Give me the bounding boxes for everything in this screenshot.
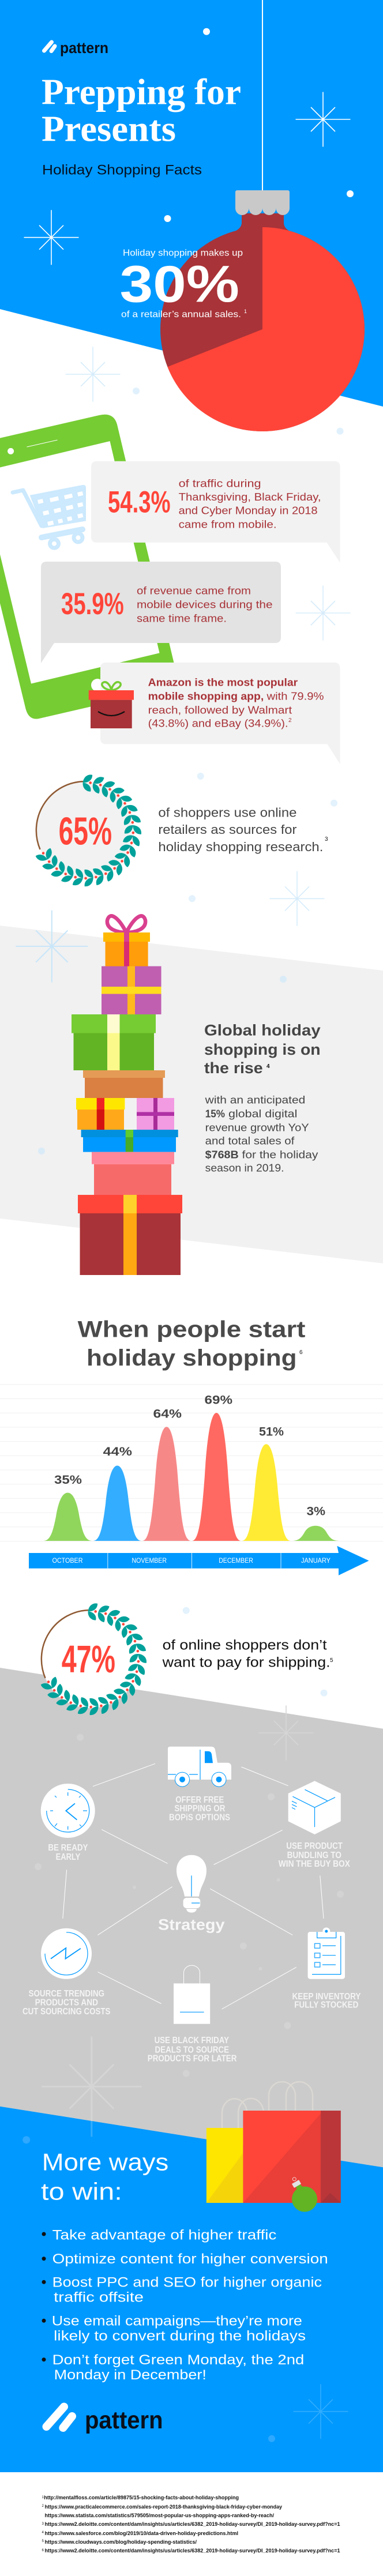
heading: when people start holiday shopping <box>78 1317 305 1371</box>
footnotes: sources: https://www.practicalecommerce.com/sales-report-2018-thanksgiving-black-friday-cyber-monday <box>45 2504 283 2510</box>
footnotes: sources: http://mentalfloss.com/article/89875/15-shocking-facts-about-holiday-shopping <box>44 2495 239 2501</box>
footnotes: sources: https://www2.deloitte.com/content/dam/insights/us/articles/6382_2019-holiday-survey/DI_2019-holiday-survey.pdf?nc=1 <box>45 2548 340 2554</box>
icon: product box <box>288 1781 341 1834</box>
label: product bundling: USE PRODUCT <box>286 1841 343 1851</box>
panel: revenue speech bubble: of revenue came from <box>137 585 251 597</box>
panel: Amazon speech bubble: (43.8%) and eBay (34.9%). <box>148 717 288 729</box>
callout: holiday shopping 30 percent <box>120 249 247 319</box>
chart: bell bars by month: 51% <box>259 1426 284 1439</box>
label: be ready early: BE READY <box>48 1843 88 1853</box>
subtitle: Holiday Shopping Facts <box>42 163 202 178</box>
text block: global revenue growth: global digital <box>228 1108 297 1120</box>
footnotes: sources: 5 <box>42 2540 44 2543</box>
callout: holiday shopping 30 percent: 30% <box>120 256 239 314</box>
text block: global revenue growth: $768B <box>205 1149 239 1160</box>
panel: traffic speech bubble: and Cyber Monday in 2018 <box>179 505 318 516</box>
icon: shopping bag <box>174 1965 210 2024</box>
text block: 65% of shoppers: retailers as sources for <box>158 822 296 837</box>
panel: Amazon speech bubble <box>100 663 340 764</box>
footnotes: sources: https://www.cloudways.com/blog/holiday-spending-statistics/ <box>45 2539 197 2545</box>
heading: when people start holiday shopping: When people start <box>78 1317 305 1342</box>
label: source trending products: PRODUCTS AND <box>35 1998 98 2007</box>
callout: holiday shopping 30 percent: of a retailer’s annual sales. <box>121 310 241 319</box>
text block: 65% of shoppers: holiday shopping research. <box>158 840 323 854</box>
label: black friday deals: PRODUCTS FOR LATER <box>148 2054 236 2063</box>
heading: global holiday shopping <box>204 1022 321 1077</box>
footnotes: sources: 4 <box>42 2531 44 2534</box>
callout: holiday shopping 30 percent: Holiday shopping makes up <box>123 249 243 258</box>
logo: pattern bottom <box>46 2406 163 2434</box>
footnotes: sources <box>42 2495 340 2554</box>
bullet list: tactics: Monday in December! <box>54 2367 206 2383</box>
text block: 65% of shoppers: 3 <box>325 836 328 843</box>
decorative snow: strategy section <box>35 1607 344 2077</box>
panel: grey gift band <box>0 926 383 1263</box>
wreath chart: 65% <box>35 774 142 887</box>
bullet list: tactics: Boost PPC and SEO for higher organic <box>52 2275 322 2291</box>
label: free shipping <box>169 1795 230 1823</box>
footnotes: sources: https://www.salesforce.com/blog/2019/10/data-driven-holiday-predictions.html <box>45 2530 238 2537</box>
panel: revenue speech bubble <box>41 562 281 663</box>
chart: bell bars by month: 44% <box>103 1445 132 1458</box>
label: free shipping: BOPiS OPTIONS <box>169 1813 230 1823</box>
decorative snow: wreath area <box>189 773 337 926</box>
label: black friday deals: DEALS TO SOURCE <box>155 2045 229 2055</box>
label: product bundling: BUNDLING TO <box>287 1851 341 1860</box>
panel: blue more ways section <box>0 2107 383 2472</box>
text block: global revenue growth: with an anticipated <box>205 1094 305 1105</box>
callout: holiday shopping 30 percent: 1 <box>244 309 247 314</box>
chart: bell bars by month <box>0 1385 383 1541</box>
title <box>42 72 241 149</box>
text block: 65% of shoppers: of shoppers use online <box>158 806 296 820</box>
panel: traffic speech bubble: came from mobile. <box>179 518 277 530</box>
illustration: shopping bags <box>206 2082 341 2203</box>
title: Presents <box>42 109 176 149</box>
panel: Amazon speech bubble: 2 <box>288 717 292 724</box>
connector lines: strategy network <box>63 1763 324 2009</box>
label: free shipping: OFFER FREE <box>175 1795 224 1805</box>
text block: global revenue growth: 15% <box>205 1108 225 1120</box>
footnotes: sources: 2 <box>42 2504 44 2508</box>
text block: 47% of online shoppers: of online shoppers don’t <box>163 1638 327 1653</box>
heading: more ways to win: to win: <box>41 2178 122 2205</box>
text block: 47% of online shoppers <box>162 1638 333 1671</box>
text block: 47% of online shoppers: want to pay for shipping. <box>162 1655 331 1671</box>
text block: 65% of shoppers <box>158 806 328 854</box>
label: product bundling: WIN THE BUY BOX <box>279 1859 350 1869</box>
arrow: month timeline <box>29 1546 369 1575</box>
chart: bell bars by month: 69% <box>204 1393 232 1407</box>
icon: delivery truck <box>168 1747 231 1787</box>
bullet list: tactics: Don’t forget Green Monday, the 2nd <box>52 2352 304 2368</box>
label: Strategy: Strategy <box>158 1916 225 1933</box>
panel: Amazon speech bubble: with 79.9% <box>266 691 324 702</box>
icon: Amazon gift box <box>89 682 134 728</box>
footnotes: sources: https://www.statista.com/statistics/579505/most-popular-us-shopping-apps-ranked-by-reach/ <box>45 2513 274 2519</box>
title: Prepping for <box>42 72 241 112</box>
text block: global revenue growth: revenue growth YoY <box>205 1122 309 1134</box>
wreath chart: 47%: 47% <box>62 1638 115 1681</box>
panel: blue header background <box>0 0 383 407</box>
bullet list: tactics: traffic offsite <box>54 2290 144 2306</box>
panel: revenue speech bubble: mobile devices during the <box>137 599 272 610</box>
chart: bell bars by month: 35% <box>54 1473 82 1487</box>
arrow: month timeline: OCTOBER <box>52 1556 83 1565</box>
panel: revenue speech bubble: same time frame. <box>137 612 227 624</box>
chart: bell bars by month: 64% <box>153 1408 182 1421</box>
arrow: month timeline: NOVEMBER <box>132 1556 167 1565</box>
text block: global revenue growth: season in 2019. <box>205 1163 284 1174</box>
icon: inventory clipboard <box>308 1927 345 1979</box>
label: black friday deals <box>148 2036 236 2063</box>
label: source trending products: SOURCE TRENDING <box>29 1989 104 1999</box>
icon: light bulb strategy <box>177 1855 206 1913</box>
heading: more ways to win <box>41 2148 168 2205</box>
icon: green phone <box>0 415 179 719</box>
panel: Amazon speech bubble: Amazon is the most popular <box>148 677 298 689</box>
icon: green ornament <box>292 2178 317 2212</box>
wreath chart: 65%: 65% <box>59 810 112 853</box>
heading: when people start holiday shopping: holiday shopping <box>87 1345 296 1371</box>
chart: bell bars by month: 3% <box>307 1505 325 1518</box>
bullet list: tactics: likely to convert during the holidays <box>54 2329 306 2344</box>
label: product bundling <box>279 1841 350 1869</box>
panel: traffic speech bubble: 54.3% <box>108 486 171 520</box>
bullet list: tactics: Use email campaigns—they’re more <box>52 2314 302 2329</box>
text block: global revenue growth <box>205 1094 318 1174</box>
label: keep inventory stocked <box>292 1992 361 2010</box>
footnotes: sources: 1 <box>42 2496 44 2499</box>
label: source trending products: CUT SOURCING COSTS <box>22 2007 110 2017</box>
panel: revenue speech bubble: 35.9% <box>61 587 124 621</box>
panel: traffic speech bubble: of traffic during <box>179 477 261 489</box>
label: black friday deals: USE BLACK FRIDAY <box>155 2036 230 2045</box>
decorative snow: blue footer <box>22 2036 348 2442</box>
label: be ready early <box>48 1843 88 1862</box>
footnotes: sources: 3 <box>42 2522 44 2526</box>
arrow: month timeline: DECEMBER <box>219 1556 253 1565</box>
bullet list: tactics <box>42 2227 328 2383</box>
footnotes: sources: https://www2.deloitte.com/content/dam/insights/us/articles/6382_2019-holiday-survey/DI_2019-holiday-survey.pdf?nc=1 <box>45 2521 340 2528</box>
illustration: stack of gifts <box>72 916 182 1275</box>
label: source trending products <box>22 1989 110 2017</box>
heading: global holiday shopping: Global holiday <box>204 1022 321 1039</box>
bullet list: tactics: Optimize content for higher conversion <box>52 2251 328 2267</box>
decorative snow: gift band <box>16 910 287 1155</box>
panel: traffic speech bubble: Thanksgiving, Black Friday, <box>179 491 321 503</box>
heading: global holiday shopping: 4 <box>266 1063 270 1070</box>
panel: traffic speech bubble <box>91 461 340 563</box>
arrow: month timeline: JANUARY <box>301 1556 331 1565</box>
label: keep inventory stocked: FULLY STOCKED <box>294 2000 358 2010</box>
decorative snow: header dots and sparkles <box>24 28 354 265</box>
icon: trending circle <box>41 1928 92 1979</box>
text block: global revenue growth: and total sales of <box>205 1135 295 1146</box>
text block: global revenue growth: for the holiday <box>242 1149 318 1160</box>
footnotes: sources: 6 <box>42 2549 44 2552</box>
panel: Amazon speech bubble: mobile shopping app, <box>148 691 264 702</box>
icon: shopping cart <box>13 485 86 550</box>
bullet list: tactics: Take advantage of higher traffic <box>52 2227 276 2243</box>
icon: clock <box>41 1784 95 1838</box>
label: free shipping: SHIPPING OR <box>174 1804 225 1814</box>
heading: global holiday shopping: the rise <box>204 1059 263 1077</box>
logo: pattern top: pattern <box>60 39 108 57</box>
decorative snow: white area <box>66 347 351 640</box>
heading: when people start holiday shopping: 6 <box>299 1349 303 1356</box>
panel: Amazon speech bubble: reach, followed by Walmart <box>148 704 292 716</box>
heading: more ways to win: More ways <box>42 2148 168 2175</box>
label: keep inventory stocked: KEEP INVENTORY <box>292 1992 361 2002</box>
ornament pie chart: 30% <box>160 0 365 431</box>
text block: 47% of online shoppers: 5 <box>330 1657 333 1664</box>
heading: global holiday shopping: shopping is on <box>204 1041 321 1058</box>
logo: pattern bottom: pattern <box>85 2406 163 2434</box>
panel: grey strategy section <box>0 1668 383 2180</box>
wreath chart: 47% <box>40 1603 147 1716</box>
label: be ready early: EARLY <box>56 1852 81 1862</box>
